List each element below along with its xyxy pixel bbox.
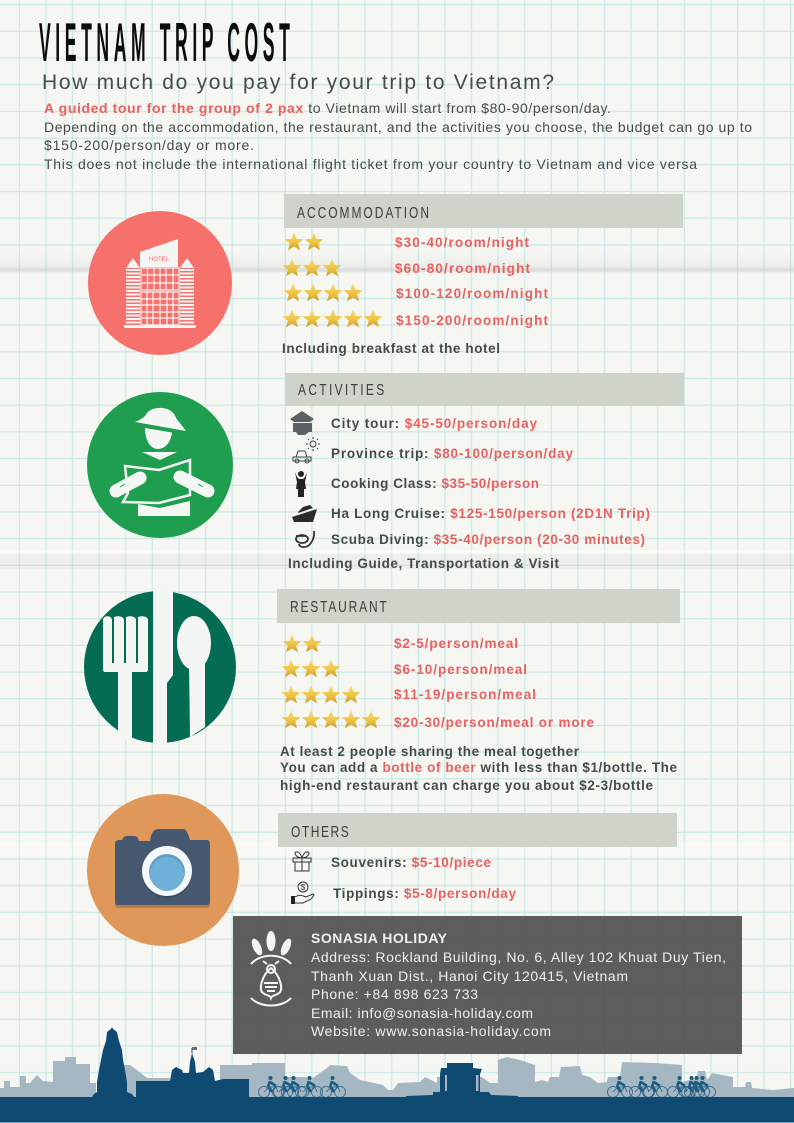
intro text: A guided tour for the group of 2 pax to Vietnam will start from $80-90/person/day.	[44, 100, 611, 116]
icon: scuba mask	[296, 531, 314, 547]
subtitle: How much do you pay for your trip to Vietnam?	[42, 71, 554, 94]
pagoda, palace and memorial	[92, 1027, 518, 1097]
text: tippings: Tippings: $5-8/person/day	[333, 886, 516, 901]
contact text: Phone: +84 898 623 733	[311, 986, 478, 1002]
heading: restaurant	[277, 589, 680, 623]
text: ha long cruise: Ha Long Cruise: $125-150/person (2D1N Trip)	[331, 506, 650, 521]
contact text: Address: Rockland Building, No. 6, Alley 102 Khuat Duy Tien,	[311, 949, 726, 965]
note	[280, 744, 677, 793]
distant buildings	[0, 1057, 794, 1097]
star ratings	[282, 232, 382, 327]
panel: accommodation	[282, 194, 683, 356]
icon: tip in hand	[291, 882, 314, 904]
text: scuba diving: Scuba Diving: $35-40/person (20-30 minutes)	[331, 532, 645, 547]
prices: $20-30/person/meal or more	[394, 715, 594, 730]
icon: province trip car and sun	[293, 437, 320, 463]
contact text: SONASIA HOLIDAY	[311, 930, 448, 946]
prices: $60-80/room/night	[395, 261, 530, 276]
panel: restaurant	[277, 589, 680, 793]
text: souvenirs: Souvenirs: $5-10/piece	[331, 855, 491, 870]
icon: hotel	[88, 211, 232, 355]
heading: accommodation: ACCOMMODATION	[297, 203, 429, 221]
star ratings	[282, 634, 380, 728]
bicycle riders	[258, 1076, 716, 1098]
note: Including Guide, Transportation & Visit	[288, 556, 560, 571]
icon: cruise ship	[292, 505, 317, 522]
note: At least 2 people sharing the meal together	[280, 744, 580, 759]
note: Including breakfast at the hotel	[282, 341, 500, 356]
text: city tour: City tour: $45-50/person/day	[331, 416, 537, 431]
icon: gift	[293, 852, 311, 871]
contact text: Email: info@sonasia-holiday.com	[311, 1005, 533, 1021]
intro text: Depending on the accommodation, the restaurant, and the activities you choose, the budget can go up to	[44, 119, 752, 135]
prices: $2-5/person/meal	[394, 636, 518, 651]
icon: tip in hand: $	[301, 883, 306, 892]
prices: $150-200/room/night	[396, 313, 548, 328]
contact text: Thanh Xuan Dist., Hanoi City 120415, Vietnam	[311, 968, 628, 984]
prices: $11-19/person/meal	[394, 687, 536, 702]
prices: $100-120/room/night	[396, 286, 548, 301]
icon: hotel: HOTEL	[149, 257, 170, 263]
heading: accommodation	[284, 194, 683, 228]
heading: activities: ACTIVITIES	[298, 380, 384, 398]
panel: activities	[285, 373, 684, 571]
text: cooking class: Cooking Class: $35-50/person	[331, 476, 539, 491]
icon: camera	[87, 794, 239, 946]
prices: $6-10/person/meal	[394, 662, 527, 677]
icon: cooking class	[295, 471, 307, 497]
prices	[394, 636, 594, 730]
title: VIETNAM TRIP COST	[39, 11, 290, 73]
intro text: $150-200/person/day or more.	[44, 137, 254, 153]
text: province trip: Province trip: $80-100/person/day	[331, 446, 573, 461]
contact text: Website: www.sonasia-holiday.com	[311, 1023, 551, 1039]
intro text: This does not include the international flight ticket from your country to Vietnam and vice versa	[44, 156, 697, 172]
icon: guide with map	[87, 392, 233, 538]
heading: others	[278, 813, 677, 847]
note: You can add a bottle of beer with less than $1/bottle. The	[280, 760, 677, 775]
ground	[0, 1097, 794, 1122]
prices: $30-40/room/night	[395, 235, 530, 250]
icon: city tour pagoda	[290, 411, 314, 435]
panel: others	[278, 813, 677, 904]
prices	[395, 235, 548, 328]
note: high-end restaurant can charge you about $2-3/bottle	[280, 778, 653, 793]
panel: contact details	[233, 916, 742, 1054]
logo: sonasia bee	[250, 931, 293, 1006]
heading: restaurant: RESTAURANT	[290, 597, 387, 615]
heading: activities	[285, 373, 684, 406]
intro text	[44, 100, 752, 172]
contact text	[311, 930, 726, 1039]
icon: fork, knife and spoon	[84, 589, 236, 745]
heading: others: OTHERS	[291, 822, 349, 840]
skyline footer	[0, 1027, 794, 1123]
